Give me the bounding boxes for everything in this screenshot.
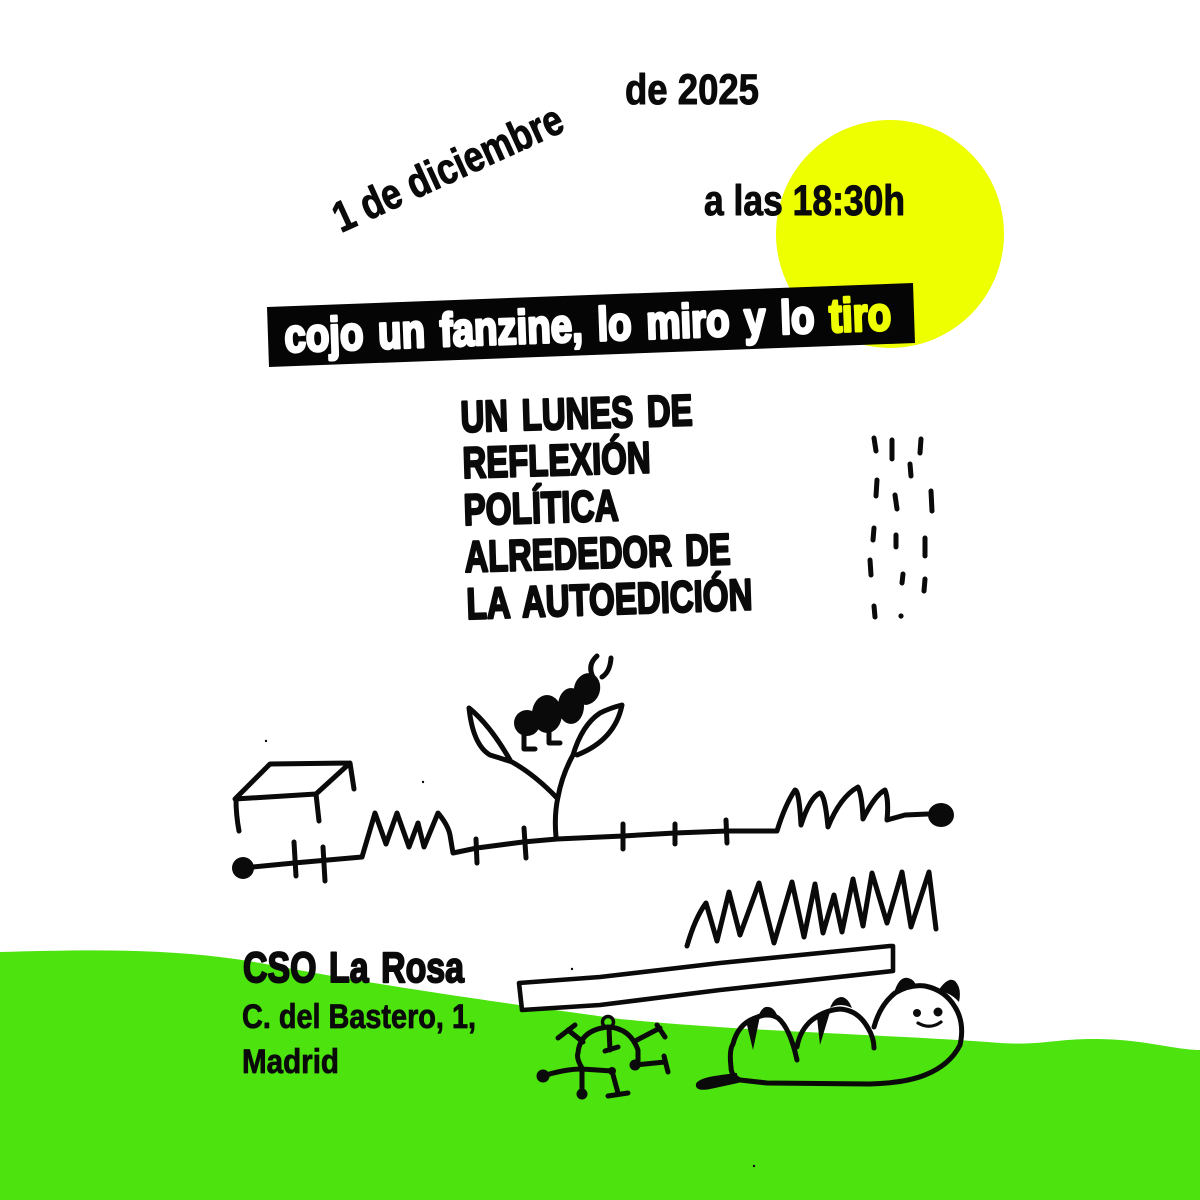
date: 1 de diciembre: 1 de diciembre	[325, 96, 571, 242]
big zigzag grass	[687, 872, 936, 946]
end dots	[232, 857, 254, 879]
long white bar	[519, 946, 893, 1010]
icon: virus creature	[536, 1016, 668, 1100]
green hill background	[0, 950, 1200, 1200]
banner text: cojo un fanzine, lo miro y lo tiro	[283, 287, 892, 362]
icon: table	[235, 763, 354, 831]
yellow sun circle	[776, 120, 1004, 348]
rain dashes	[870, 438, 932, 619]
ink specks	[265, 740, 755, 1167]
heading: un lunes de reflexion politica: UN LUNES DE	[460, 386, 693, 442]
venue address	[242, 998, 476, 1081]
ticks	[294, 820, 727, 881]
heading: un lunes de reflexion politica: REFLEXIÓN	[462, 432, 651, 488]
date: de 2025: de 2025	[625, 66, 759, 114]
illustration: ground line with grass	[232, 787, 954, 881]
heading: un lunes de reflexion politica	[460, 386, 753, 629]
heading: un lunes de reflexion politica: POLÍTICA	[463, 480, 619, 535]
time: a las 18:30h: a las 18:30h	[704, 177, 905, 225]
venue name: CSO La Rosa	[243, 944, 465, 992]
venue address: C. del Bastero, 1,	[242, 998, 476, 1036]
heading: un lunes de reflexion politica: ALREDEDOR DE	[464, 525, 731, 582]
heading: un lunes de reflexion politica: LA AUTOEDICIÓN	[466, 570, 753, 629]
icon: caterpillar on plant	[514, 656, 611, 749]
venue address: Madrid	[242, 1043, 339, 1081]
banner: fanzine title	[267, 283, 915, 367]
icon: smiling caterpillar	[697, 978, 962, 1089]
icon: plant	[469, 705, 622, 837]
